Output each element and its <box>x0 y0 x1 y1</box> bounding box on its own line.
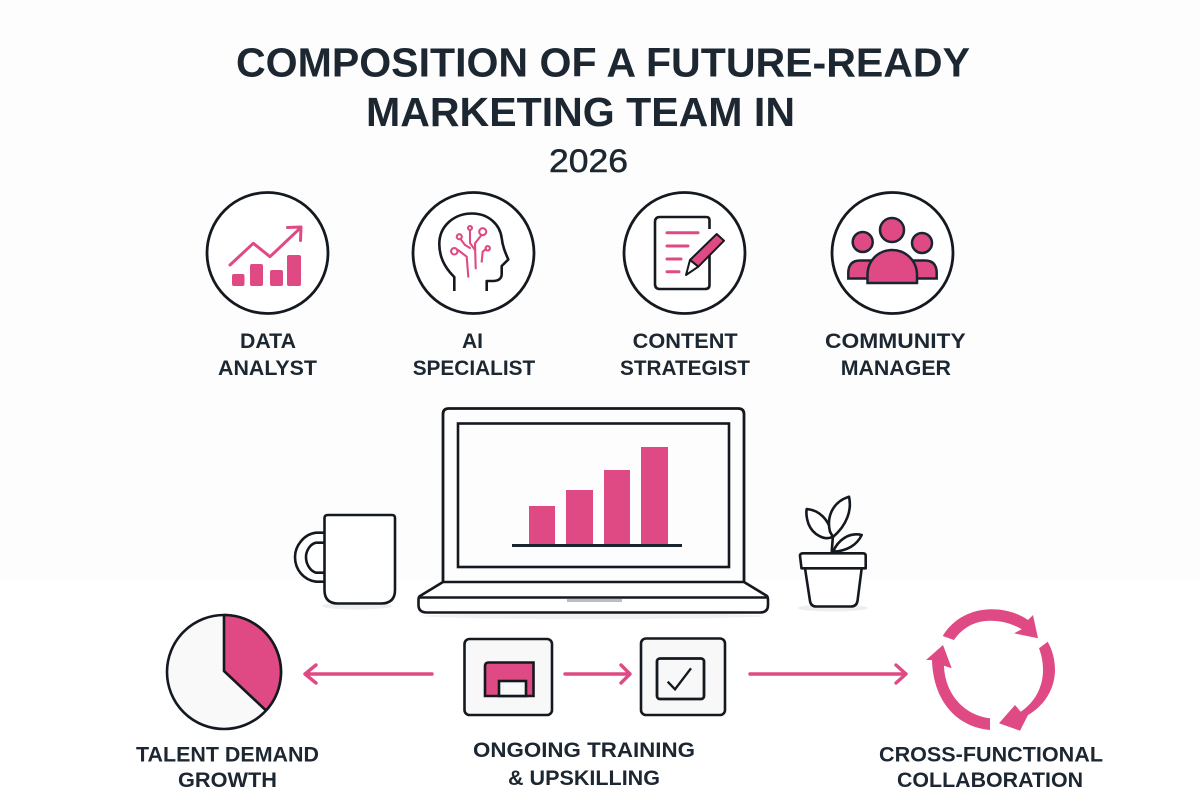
label: ongoing training <box>473 738 695 790</box>
label: talent demand growth <box>136 743 319 792</box>
icon: AI specialist <box>413 192 534 314</box>
label: cross-functional collaboration: CROSS-FUNCTIONAL <box>879 743 1103 767</box>
label: ongoing training: ONGOING TRAINING <box>473 738 695 762</box>
title: 2026 <box>549 143 628 179</box>
icon: checkbox box <box>641 638 725 715</box>
label: content strategist: STRATEGIST <box>620 356 750 380</box>
label: data analyst: ANALYST <box>218 356 317 380</box>
arrow: training to checklist <box>565 665 630 683</box>
icon: community manager <box>832 192 953 314</box>
laptop with bar chart <box>418 408 768 619</box>
icon: content strategist <box>624 192 745 314</box>
label: ongoing training: & UPSKILLING <box>508 766 660 790</box>
title: MARKETING TEAM IN <box>366 89 795 135</box>
label: data analyst <box>218 329 317 380</box>
label: community manager: MANAGER <box>841 356 951 380</box>
label: data analyst: DATA <box>240 329 296 353</box>
icon: potted plant <box>798 497 868 612</box>
label: community manager <box>825 329 966 380</box>
pie chart: talent demand <box>167 615 281 729</box>
label: AI specialist: AI <box>462 329 483 353</box>
icon: data analyst <box>207 192 328 314</box>
label: content strategist: CONTENT <box>633 329 738 353</box>
label: content strategist <box>620 329 750 380</box>
label: talent demand growth: TALENT DEMAND <box>136 743 319 767</box>
title: COMPOSITION OF A FUTURE-READY <box>236 40 970 86</box>
label: cross-functional collaboration <box>879 743 1103 792</box>
arrow: to collaboration <box>750 665 906 683</box>
bar chart <box>512 447 682 547</box>
label: AI specialist <box>413 329 535 380</box>
label: community manager: COMMUNITY <box>825 329 966 353</box>
label: talent demand growth: GROWTH <box>178 768 277 792</box>
icon: training box <box>464 639 552 715</box>
title <box>236 40 970 179</box>
icon: collaboration cycle <box>926 609 1055 731</box>
label: cross-functional collaboration: COLLABORATION <box>897 768 1083 792</box>
label: AI specialist: SPECIALIST <box>413 356 535 380</box>
icon: coffee mug <box>295 515 395 610</box>
arrow: to talent demand <box>305 665 432 683</box>
